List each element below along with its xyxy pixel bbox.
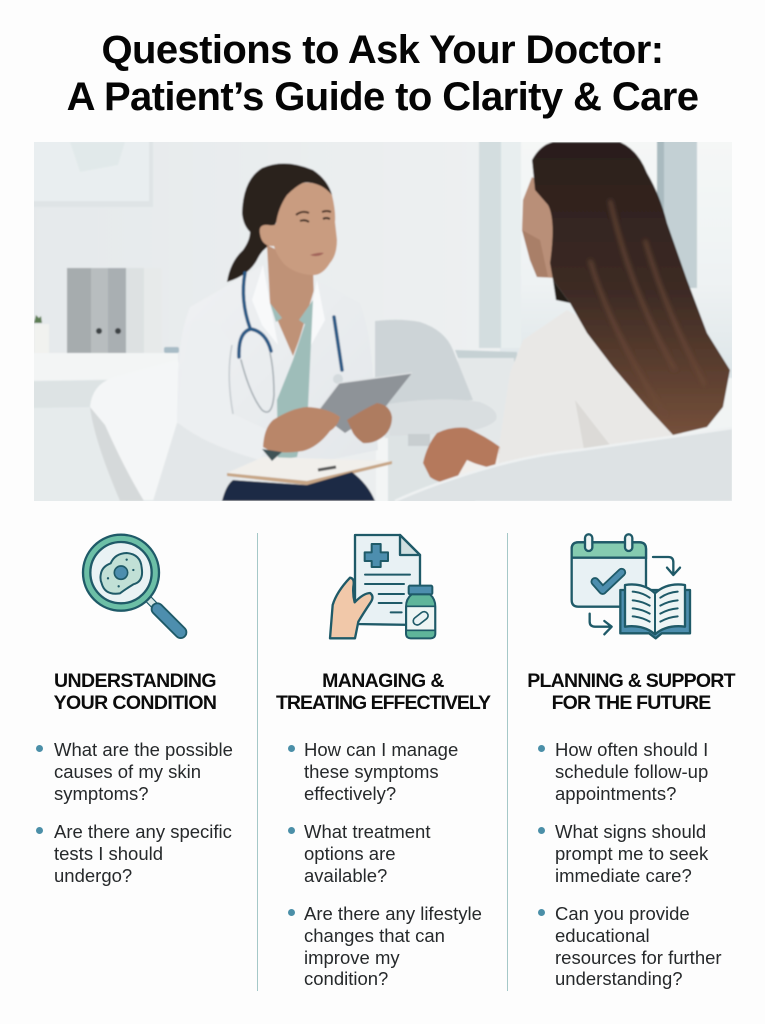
heading: TREATING EFFECTIVELY	[276, 692, 490, 714]
question	[54, 739, 233, 804]
question: Are there any lifestyle	[304, 903, 482, 924]
bullet	[36, 745, 43, 752]
title: Questions to Ask Your Doctor:	[102, 28, 663, 72]
question: options are	[304, 843, 396, 864]
doctor	[153, 163, 412, 501]
question list	[36, 739, 233, 886]
heading: YOUR CONDITION	[54, 692, 216, 714]
title: A Patient’s Guide to Clarity & Care	[67, 75, 698, 119]
bullet	[36, 827, 43, 834]
question: appointments?	[555, 783, 676, 804]
bullet	[538, 745, 545, 752]
dark trousers	[222, 472, 375, 501]
question: undergo?	[54, 865, 132, 886]
question: How can I manage	[304, 739, 458, 760]
patient blouse	[497, 310, 700, 470]
doctor's white chair	[90, 360, 388, 502]
question: resources for further	[555, 947, 722, 968]
question list	[288, 739, 482, 989]
question	[304, 821, 430, 886]
photo: doctor consulting with patient	[34, 142, 732, 501]
heading: FOR THE FUTURE	[552, 692, 710, 714]
clipboard	[227, 457, 392, 481]
neck	[267, 245, 314, 356]
question	[555, 821, 708, 886]
patient	[395, 142, 732, 501]
heading: MANAGING &	[322, 670, 444, 692]
shelf with binders and plant	[30, 268, 179, 408]
question: improve my	[304, 947, 400, 968]
bullet	[288, 909, 295, 916]
lab coat	[153, 265, 378, 501]
coat sleeve	[177, 320, 272, 460]
bullet	[288, 745, 295, 752]
column: planning and support	[527, 533, 736, 989]
question: What are the possible	[54, 739, 233, 760]
bullet	[288, 827, 295, 834]
question: Can you provide	[555, 903, 690, 924]
question: causes of my skin	[54, 761, 201, 782]
bullet	[538, 909, 545, 916]
icon: magnifying glass over cell	[82, 534, 188, 639]
heading: PLANNING & SUPPORT	[527, 670, 735, 692]
question: How often should I	[555, 739, 708, 760]
question: effectively?	[304, 783, 396, 804]
title	[67, 28, 698, 119]
bullet	[538, 827, 545, 834]
column: understanding your condition	[36, 534, 233, 886]
question: schedule follow-up	[555, 761, 708, 782]
question: these symptoms	[304, 761, 439, 782]
question	[54, 821, 232, 886]
heading	[54, 670, 216, 714]
picture frame	[30, 138, 153, 207]
long brown hair	[532, 142, 730, 435]
foreground chair back	[395, 428, 732, 501]
heading: UNDERSTANDING	[54, 670, 216, 692]
question	[555, 739, 708, 804]
patient face	[522, 177, 565, 278]
icon: calendar, book and arrows	[570, 533, 692, 640]
question: Are there any specific	[54, 821, 232, 842]
clasped hands and cuff	[423, 428, 500, 483]
ponytail and hair	[227, 163, 332, 282]
column: managing and treating effectively	[276, 534, 491, 989]
question: symptoms?	[54, 783, 149, 804]
question: immediate care?	[555, 865, 692, 886]
heading	[276, 670, 491, 714]
icon: medical document, hand and pill bottle	[328, 534, 436, 640]
stethoscope	[239, 273, 342, 412]
divider	[507, 533, 508, 991]
question: What signs should	[555, 821, 706, 842]
hands	[263, 407, 340, 452]
question: available?	[304, 865, 387, 886]
question	[555, 903, 722, 989]
heading	[527, 670, 736, 714]
question: prompt me to seek	[555, 843, 708, 864]
question	[304, 739, 458, 804]
face	[260, 183, 337, 275]
room background	[30, 138, 740, 508]
question: educational	[555, 925, 650, 946]
question: What treatment	[304, 821, 430, 842]
gray armchair in background	[375, 320, 497, 446]
teal blouse	[270, 300, 313, 460]
question: condition?	[304, 968, 388, 989]
question	[304, 903, 482, 989]
question: understanding?	[555, 968, 683, 989]
tablet	[317, 373, 412, 433]
question: tests I should	[54, 843, 163, 864]
question list	[538, 739, 722, 989]
divider	[257, 533, 258, 991]
question: changes that can	[304, 925, 445, 946]
